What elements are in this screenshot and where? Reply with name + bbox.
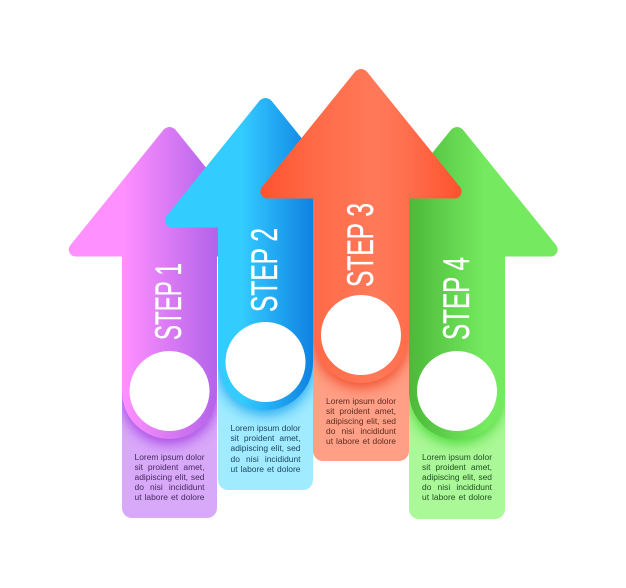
- description: step 1: Lorem ipsum dolor: [134, 452, 204, 462]
- arrow: step 3: [260, 69, 462, 461]
- text panel: step 3: [313, 269, 409, 461]
- text panel: step 1: [122, 327, 217, 518]
- arrow body: step 3: [260, 69, 462, 383]
- description: step 2: adipiscing elit, sed: [230, 443, 300, 453]
- description: step 1: ut labore et dolore: [134, 492, 204, 502]
- description: step 3: adipiscing elit, sed: [326, 416, 396, 426]
- white circle: step 4: [417, 351, 497, 431]
- arrow: step 2: [164, 98, 313, 490]
- description: step 2: [230, 423, 300, 475]
- panel shadow: step 4: [409, 394, 505, 454]
- description: step 1: adipiscing elit, sed: [134, 472, 204, 482]
- description: step 1: sit proident amet,: [134, 462, 204, 472]
- panel shadow: step 3: [313, 337, 409, 397]
- description: step 2: Lorem ipsum dolor: [230, 423, 300, 433]
- white circle: step 2: [226, 322, 306, 402]
- description: step 1: [134, 452, 204, 504]
- text panel: step 4: [409, 327, 505, 519]
- white circle: step 3: [321, 295, 401, 375]
- description: step 4: Lorem ipsum dolor: [422, 452, 492, 462]
- description: step 2: sit proident amet,: [230, 433, 300, 443]
- description: step 4: do nisi incididunt: [422, 482, 492, 492]
- arrow: step 4: [409, 127, 558, 519]
- arrow body: step 1: [69, 127, 270, 439]
- description: step 2: ut labore et dolore: [230, 464, 300, 474]
- arrow body: step 4: [356, 127, 558, 439]
- label: step 4: STEP 4: [436, 257, 477, 340]
- description: step 1: do nisi incididunt: [134, 482, 204, 492]
- label: step 2: STEP 2: [244, 228, 285, 312]
- panel shadow: step 2: [218, 364, 313, 425]
- text panel: step 2: [218, 298, 313, 490]
- description: step 3: [326, 396, 396, 448]
- white circle: step 1: [130, 351, 210, 431]
- description: step 4: [422, 452, 492, 504]
- description: step 3: do nisi incididunt: [326, 426, 396, 436]
- description: step 4: ut labore et dolore: [422, 492, 492, 502]
- description: step 4: sit proident amet,: [422, 462, 492, 472]
- panel shadow: step 1: [122, 393, 217, 452]
- description: step 3: Lorem ipsum dolor: [326, 396, 396, 406]
- label: step 3: STEP 3: [340, 203, 381, 287]
- description: step 2: do nisi incididunt: [230, 454, 300, 464]
- description: step 4: adipiscing elit, sed: [422, 472, 492, 482]
- arrow: step 1: [68, 127, 218, 518]
- description: step 3: sit proident amet,: [326, 406, 396, 416]
- description: step 3: ut labore et dolore: [326, 436, 396, 446]
- label: step 1: STEP 1: [148, 263, 189, 340]
- arrow body: step 2: [165, 98, 366, 410]
